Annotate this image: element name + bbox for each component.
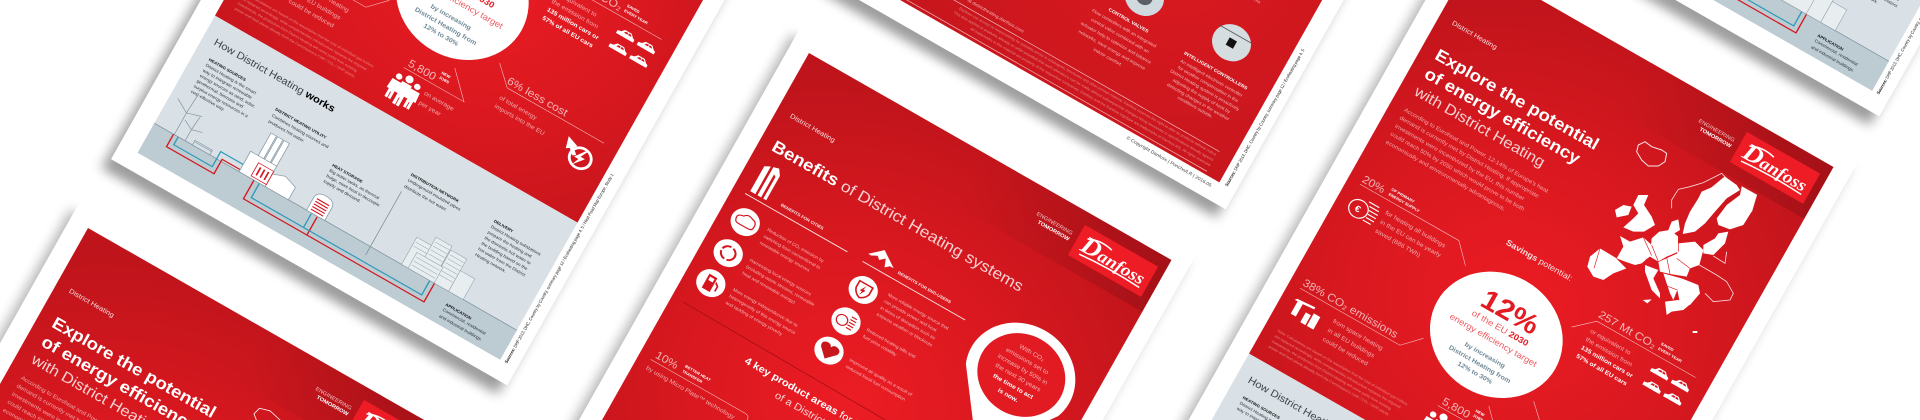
callout: time to act: the time to act <box>992 373 1035 401</box>
engineering tomorrow tagline: ENGINEERING <box>1035 211 1073 237</box>
step: application: and industrial buildings. <box>438 313 483 342</box>
benefit text: local energy: heat and renewable energy) <box>741 271 796 305</box>
stat: 20% of primary energy supply: saved (886 TWh) <box>1374 228 1421 259</box>
step: application <box>438 302 490 342</box>
step: delivery: hot water from the District <box>477 246 527 278</box>
intro paragraph: could reach 50% by 2050 which would prove to be both <box>1389 132 1525 213</box>
source note: Sources: DHP 2013, DHC, Country by Country, summary page 12 / Ecoheating page 4, 5 / Heat Road Map Europe, Study 1 <box>503 172 615 364</box>
stat: 257 Mt CO2 saved: or equivalent to <box>1589 328 1632 357</box>
benefit text: reliability: extreme weather or blackouts <box>876 312 934 348</box>
step: district heating utility: produces hot water. <box>268 119 306 143</box>
stat: 5,800 new jobs: on average <box>423 90 455 113</box>
stat: 5,800 new jobs: NEW <box>1475 408 1486 417</box>
benefit text: independence: and tackling of energy poverty <box>725 300 784 337</box>
savings circle: 12% to 30% <box>422 23 459 48</box>
product: intelligent controllers: District Heating system is proactively <box>1169 68 1241 112</box>
step: delivery: Heating network. <box>474 252 507 274</box>
iceland outline <box>1637 142 1667 166</box>
step: heat storage: Big water tanks, as thermal <box>328 168 380 200</box>
step: delivery: the domestic hot water to <box>484 235 532 266</box>
engineering tomorrow tagline: ENGINEERING <box>1697 118 1735 144</box>
footnote: power and heat plants already from the Commission's CHP / CO₂ / GHP plants <box>234 7 355 79</box>
stat: 5,800 new jobs: 5,800 <box>406 58 438 83</box>
stat: 38% CO2 emissions <box>248 0 389 47</box>
benefit text: local energy <box>741 258 820 314</box>
step: heat storage: bulge, store heat to decouple <box>326 173 381 208</box>
step: heat storage: supply and demand. <box>323 178 362 204</box>
copyright: © Copyright Danfoss | Poncho/LR | 2016.05 <box>1125 135 1213 189</box>
step: heating sources: way to integrate renewable <box>202 68 254 100</box>
stat: 20% of primary energy supply: ENERGY SUPPLY <box>1388 192 1421 213</box>
source note: Sources: DHP 2013, DHC, Country by Country, summary page 12 / Ecoheating page 4, 5 <box>1224 47 1306 187</box>
step: application: APPLICATION <box>445 302 472 321</box>
stat: 10% better heat transfer: 10% <box>653 350 680 372</box>
kicker: District Heating <box>1451 19 1498 51</box>
product: control valves: networks, save energy and improve <box>1078 29 1147 71</box>
title: Explore the potential <box>1432 45 1602 154</box>
non-eu outlines <box>1672 173 1757 302</box>
diagram: wind turbines and solar <box>162 85 233 155</box>
product: control valves: indoor comfort. <box>1093 47 1123 67</box>
savings circle: District Heating from <box>1447 344 1512 385</box>
product: intelligent controllers: adjusting the supply of heat by <box>1172 78 1232 115</box>
poster: bottom-left efficiency poster, header <box>0 199 476 420</box>
step: district heating utility: Combines heating sources and <box>271 113 330 150</box>
footnote: investments, the production from District Heating will come partly from existing <box>1271 340 1392 411</box>
step: heating sources <box>190 57 265 124</box>
engineering tomorrow tagline: TOMORROW <box>315 395 350 418</box>
diagram: pipes <box>163 127 439 302</box>
stat: 257 Mt CO2 saved: EVERY YEAR <box>1657 346 1683 363</box>
step: delivery: District Heating substations <box>490 224 542 257</box>
stat: 5,800 new jobs <box>1415 381 1510 420</box>
stat: 6% less cost: 6% less cost <box>505 76 570 120</box>
savings circle: of the EU 2030 <box>1470 308 1530 348</box>
stat: 6% less cost <box>474 63 613 174</box>
benefit text: co2 reduction <box>759 227 825 277</box>
panel: how district heating works <box>1172 354 1612 420</box>
step: distribution network: Underground insulated pipes <box>407 178 462 212</box>
icon: recycling arrows <box>708 234 748 272</box>
step: heating sources: surplus energy resources in a <box>193 84 249 119</box>
step: distribution network <box>366 172 465 285</box>
stat: 257 Mt CO2 saved: the emission from <box>1584 336 1633 368</box>
poster: top-left efficiency poster, lower half <box>101 0 825 397</box>
logo fold band <box>1617 60 1834 219</box>
product: control valves: Flow controllers with an integrated <box>1091 8 1158 49</box>
stat: 38% CO2 emissions: 38% CO₂ emissions <box>1301 278 1400 341</box>
callout: time to act: the next 30 years <box>994 362 1042 393</box>
step: heating sources: District Heating is the smart <box>205 63 258 96</box>
product: control valves: control valve combined with an <box>1090 17 1150 54</box>
engineering tomorrow tagline: ENGINEERING <box>314 386 352 412</box>
savings circle: 12% to 30% <box>1456 361 1493 386</box>
benefit text: air quality: Improved air quality as a result of <box>849 358 914 397</box>
stat: 257 Mt CO2 saved: 135 million cars or <box>546 7 600 42</box>
benefit text: air quality: reduced fossil fuel consumption <box>845 364 907 402</box>
product: control valves: CONTROL VALVES <box>1107 7 1149 35</box>
savings circle: District Heating from <box>413 6 478 47</box>
benefit text: local energy: (including waste streams, renewable <box>745 264 816 307</box>
stat: 5,800 new jobs: NEW <box>441 70 452 79</box>
benefit text: co2 reduction: switching from conventional to <box>763 234 822 270</box>
benefit text: reliability <box>876 292 950 351</box>
stat: 10% better heat transfer: by using Micro Plate™ technology <box>645 365 736 420</box>
step: delivery: prepare the heating and <box>487 230 533 259</box>
stat: 257 Mt CO2 saved: 57% of all EU cars <box>541 15 594 50</box>
icon: people <box>381 68 426 113</box>
callout: time to act <box>928 303 1094 420</box>
logo fold band <box>234 328 450 420</box>
savings circle <box>1407 248 1586 420</box>
panel: how it works, tail of upper-right poster: Commercial, residential <box>1814 38 1859 67</box>
step: application: Commercial, residential <box>442 307 487 336</box>
savings circle: 12% <box>1475 283 1545 341</box>
benefit text: reliability: in times of disruption such as <box>880 305 937 341</box>
stat: 257 Mt CO2 saved: 135 million cars or <box>1580 345 1634 380</box>
step: district heating utility: DISTRICT HEATING UTILITY <box>274 107 328 140</box>
product: intelligent controllers: detecting changes in the weather <box>1166 82 1231 122</box>
intro paragraph: economically and environmentally advantageous. <box>1385 140 1506 213</box>
stat: 38% CO2 emissions: from space heating <box>1331 318 1384 352</box>
intro paragraph: According to Euroheat and Power, 12-14% of Europe's heat <box>1403 108 1549 195</box>
title: with District Heating <box>1411 83 1547 171</box>
diagram: city buildings <box>402 229 483 300</box>
panel: how it works, tail of upper-right poster: APPLICATION <box>1817 33 1844 52</box>
stat: 10% better heat transfer: TRANSFER <box>681 369 704 384</box>
product: control valves: actuator help to optimize and balance <box>1080 21 1152 65</box>
panel: how district heating works: HEATING SOURCES <box>1242 395 1281 420</box>
callout: time to act: emissions set to <box>1005 347 1050 376</box>
stat: 10% better heat transfer: BETTER HEAT <box>684 364 712 382</box>
benefit text: local energy: Harnessing local energy sources <box>749 258 813 297</box>
poster: right efficiency poster <box>1135 0 1920 420</box>
stat: 257 Mt CO2 saved: SAVED <box>626 3 641 14</box>
danfoss logo <box>1730 132 1820 204</box>
icon: coins: € <box>1352 204 1363 216</box>
poster: centre benefits of district heating <box>473 24 1197 420</box>
footnote: investments, the production from District Heating will come partly from existing <box>237 2 358 73</box>
savings circle: energy efficiency target <box>1448 312 1539 369</box>
stat: 257 Mt CO2 saved <box>525 0 669 78</box>
step: heating sources: HEATING SOURCES <box>208 57 247 82</box>
stat: 6% less cost: of total energy <box>498 95 539 122</box>
stat: 257 Mt CO2 saved: SAVED <box>1660 341 1675 352</box>
panel: how district heating works <box>138 16 578 360</box>
stat: 20% of primary energy supply: in the EU can be yearly <box>1379 219 1443 259</box>
benefit text: independence <box>725 287 801 342</box>
legal text: Danfoss can accept no responsibility for possible errors in catalogues, brochures and other printed material. Danfoss reserves the right to alter its products without notice. <box>958 7 1218 157</box>
step: heating sources: cost-effective way. <box>190 89 226 112</box>
footnote: power and heat plants already from the Commission's CHP / CO₂ / GHP plants <box>1268 345 1389 417</box>
stat: 20% of primary energy supply: 20% <box>1360 174 1387 196</box>
step: heating sources: energy sources as wind, solar, <box>199 73 256 109</box>
stat: 5,800 new jobs: per year <box>417 100 443 118</box>
title: of energy efficiency <box>1421 64 1584 168</box>
benefit text: bills: fuel price volatility <box>862 334 898 357</box>
danfoss logo: Danfoss <box>1737 137 1813 197</box>
product: control valves <box>1072 0 1187 79</box>
stat: 38% CO2 emissions: could be reduced <box>1321 336 1369 368</box>
panel: benefits for cities: BENEFITS FOR CITIES <box>780 202 825 231</box>
intro paragraph: demand is currently met by District Heating. If appropriate <box>1398 116 1540 200</box>
step: district heating utility <box>268 107 334 155</box>
danfoss logo: Danfoss <box>1075 230 1151 290</box>
eu countries <box>1587 177 1757 333</box>
title: Explore the potential <box>49 313 219 420</box>
kicker: District Heating <box>68 287 115 319</box>
icon: shield <box>844 271 883 309</box>
step: distribution network: DISTRIBUTION NETWORK <box>410 172 460 203</box>
poster: centre benefits poster, upper portion of a poster cut off above <box>820 0 1522 220</box>
diagram: heat storage tank <box>307 191 335 220</box>
product: intelligent controllers: An intelligent electronic controller <box>1179 59 1244 98</box>
product: intelligent controllers: conditions outside. <box>1177 95 1214 119</box>
stat: 257 Mt CO2 saved <box>1559 299 1703 416</box>
icon: house <box>866 244 899 272</box>
panel: benefits for end-users: BENEFITS FOR END-USERS <box>897 270 952 304</box>
stat: 38% CO2 emissions: in all EU buildings <box>1326 327 1376 359</box>
panel: how it works, tail of upper-right poster <box>1510 0 1920 91</box>
engineering tomorrow tagline: TOMORROW <box>1036 220 1071 243</box>
title: Benefits of District Heating systems <box>769 137 1027 295</box>
product: intelligent controllers: for weather compensation in the <box>1177 65 1240 103</box>
benefit text: co2 reduction: Reduction of CO₂ emission by <box>766 227 825 264</box>
map of europe <box>1587 142 1757 333</box>
country borders <box>1594 237 1690 290</box>
benefit text: co2 reduction: renewable energy sources <box>759 240 811 273</box>
iceland outline <box>250 405 288 420</box>
stat: 38% CO2 emissions <box>1282 273 1423 385</box>
stat: 20% of primary energy supply: for heating all buildings <box>1384 210 1446 249</box>
savings circle: by increasing <box>429 3 472 32</box>
step: delivery <box>474 219 546 285</box>
step: heating sources: geothermal, biomass and <box>196 78 245 109</box>
footnote: are replaced accordingly, while complementary infrastructure replaces the required <box>1274 334 1401 409</box>
stat: 6% less cost <box>1525 401 1647 420</box>
benefit text: reliability: can provide power and heat <box>883 299 938 333</box>
step: delivery: the building based on the <box>480 241 529 271</box>
callout: time to act: is now. <box>996 387 1019 404</box>
benefit text: independence: heterogeneity of this energy source <box>728 294 797 335</box>
stat: 10% better heat transfer <box>641 347 756 420</box>
benefit text: reliability: More reliable energy source that <box>887 292 950 331</box>
engineering tomorrow tagline: TOMORROW <box>1698 127 1733 150</box>
savings circle: by increasing <box>1463 341 1506 370</box>
step: heat storage: HEAT STORAGE <box>331 163 364 184</box>
step: delivery: DELIVERY <box>493 219 514 234</box>
callout: time to act: With CO₂ <box>1018 343 1046 363</box>
stat: 257 Mt CO2 saved: 257 Mt CO₂ <box>1596 309 1658 351</box>
product: intelligent controllers <box>1160 7 1275 129</box>
savings circle <box>373 0 552 84</box>
stat: 257 Mt CO2 saved: 57% of all EU cars <box>1575 353 1628 388</box>
product: intelligent controllers: INTELLIGENT CONTROLLERS <box>1183 51 1248 91</box>
danfoss logo <box>347 400 437 420</box>
legal text: This also applies to products already on order provided that such alterations can be made without subsequential changes being necessary in specifications already agreed. <box>953 11 1215 162</box>
panel: benefits for cities <box>691 160 866 346</box>
panel heading: How District Heating works <box>212 37 337 115</box>
step: distribution network: distribute the hot water. <box>403 184 448 212</box>
panel: how it works, tail of upper-right poster: and industrial buildings. <box>1810 44 1855 73</box>
title <box>1411 45 1602 190</box>
kicker: District Heating <box>789 112 836 144</box>
danfoss logo <box>1068 225 1158 297</box>
benefit text: independence: More energy independence due to <box>732 287 799 328</box>
stat: 5,800 new jobs: JOBS <box>438 75 451 85</box>
footnote: Note: Calculations are based on the assumption that the cost of individual gas boilers <box>1277 329 1408 406</box>
stat: 20% of primary energy supply: OF PRIMARY <box>1391 187 1416 204</box>
icon: coins <box>826 302 866 341</box>
icon: co2 cloud <box>726 203 765 241</box>
logo fold band <box>955 153 1172 312</box>
step: heat storage <box>323 163 387 213</box>
stat: 5,800 new jobs <box>381 43 476 134</box>
stat: 6% less cost: imports into the EU <box>493 103 546 137</box>
diagram: utility plant <box>239 129 313 200</box>
legal text: All trademarks in this material are property of the respective companies. Danfoss and the Danfoss logotype are trademarks of Danfoss A/S. All rights reserved. <box>969 27 1212 168</box>
intro paragraph: investments were incentivized by the EU, this number <box>1394 124 1525 202</box>
intro paragraph <box>1385 108 1549 227</box>
icon: city buildings <box>750 162 783 200</box>
benefit text: bills: Reduced heating bills and <box>866 327 917 359</box>
savings kicker: Savings potential: <box>1504 238 1574 283</box>
icon: heart <box>809 331 849 370</box>
callout: time to act: increase by 50% in <box>996 353 1049 387</box>
stat: 20% of primary energy supply <box>1342 172 1481 281</box>
panel: benefits for end-users <box>809 243 975 414</box>
icon: fuel pump <box>691 264 731 302</box>
stat: 257 Mt CO2 saved: EVERY YEAR <box>623 8 649 25</box>
